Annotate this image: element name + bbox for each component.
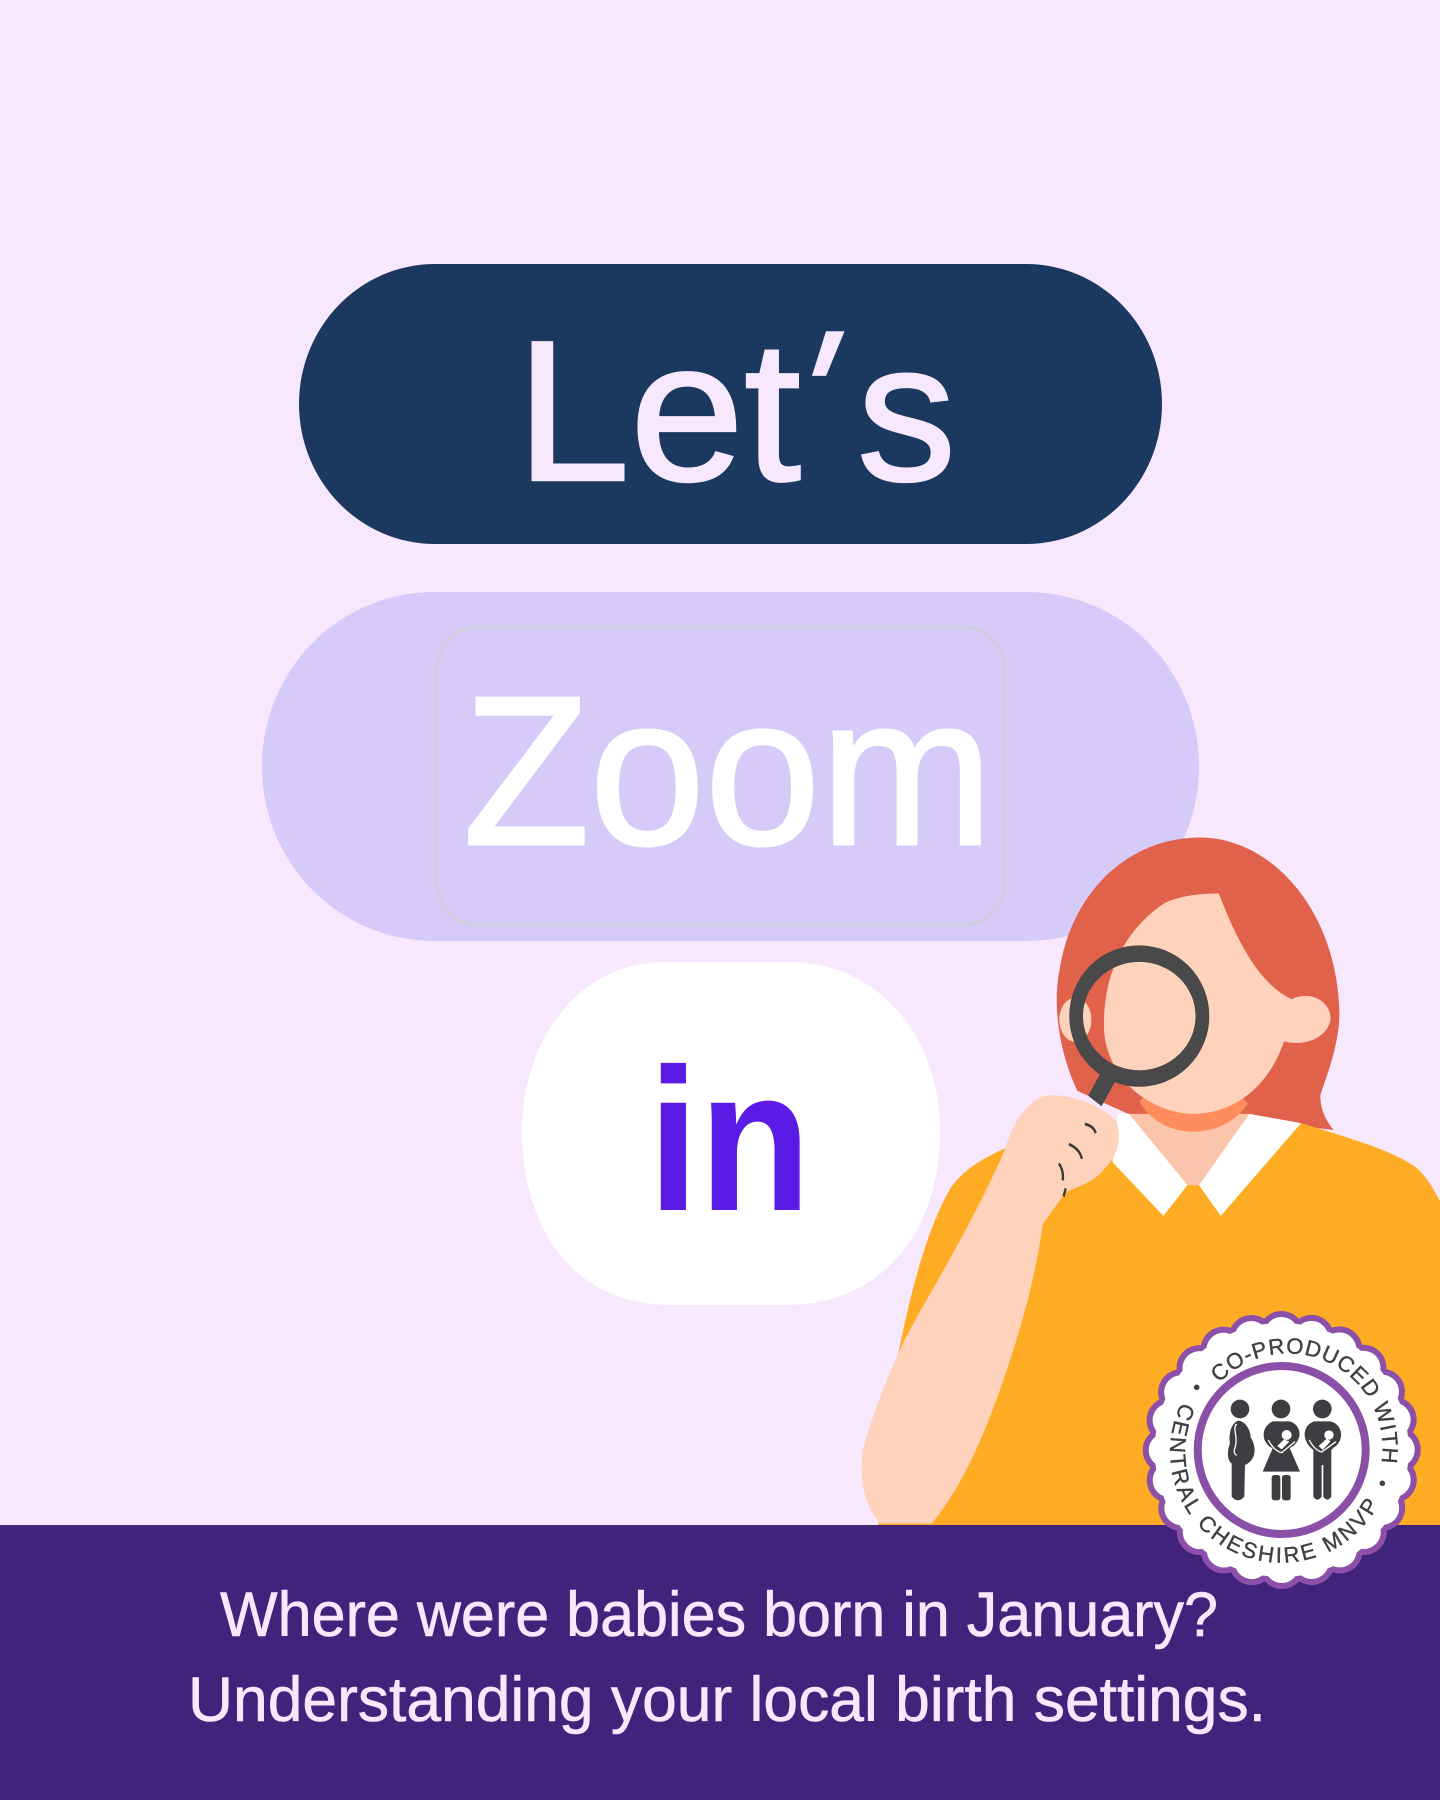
face and right ear	[1104, 893, 1331, 1114]
banner text line 2: Understanding your local birth settings.	[188, 1665, 1266, 1735]
pill: in heading	[522, 962, 940, 1305]
illustration: woman with magnifying glass	[862, 837, 1440, 1525]
icon: three parents	[1228, 1400, 1341, 1500]
magnifying glass	[1076, 954, 1202, 1101]
badge text top: CO-PRODUCED WITH	[1212, 1338, 1398, 1462]
sweater	[878, 1123, 1440, 1525]
pill: in heading: in	[648, 1027, 811, 1254]
neck	[1128, 1114, 1251, 1185]
banner text line 1: Where were babies born in January?	[220, 1580, 1218, 1650]
necklace	[1139, 1077, 1248, 1132]
pill: Let's heading: s	[857, 301, 956, 522]
pill: Zoom heading: Zoom	[463, 652, 993, 889]
pill: Let's heading	[299, 264, 1162, 544]
finger lines	[1059, 1124, 1096, 1197]
collar	[1112, 1114, 1301, 1216]
badge text bottom: CENTRAL CHESHIRE MNVP	[1170, 1405, 1374, 1563]
arm and hand	[862, 1095, 1119, 1523]
hair	[1057, 837, 1339, 1130]
pill: Zoom heading	[262, 592, 1199, 941]
bottom banner	[0, 1525, 1440, 1800]
pill: Let's heading: Let	[516, 300, 801, 523]
pill: Let's heading: '	[748, 287, 871, 518]
left ear	[1059, 998, 1091, 1042]
badge: co-produced with Central Cheshire MNVP	[1142, 1311, 1421, 1589]
